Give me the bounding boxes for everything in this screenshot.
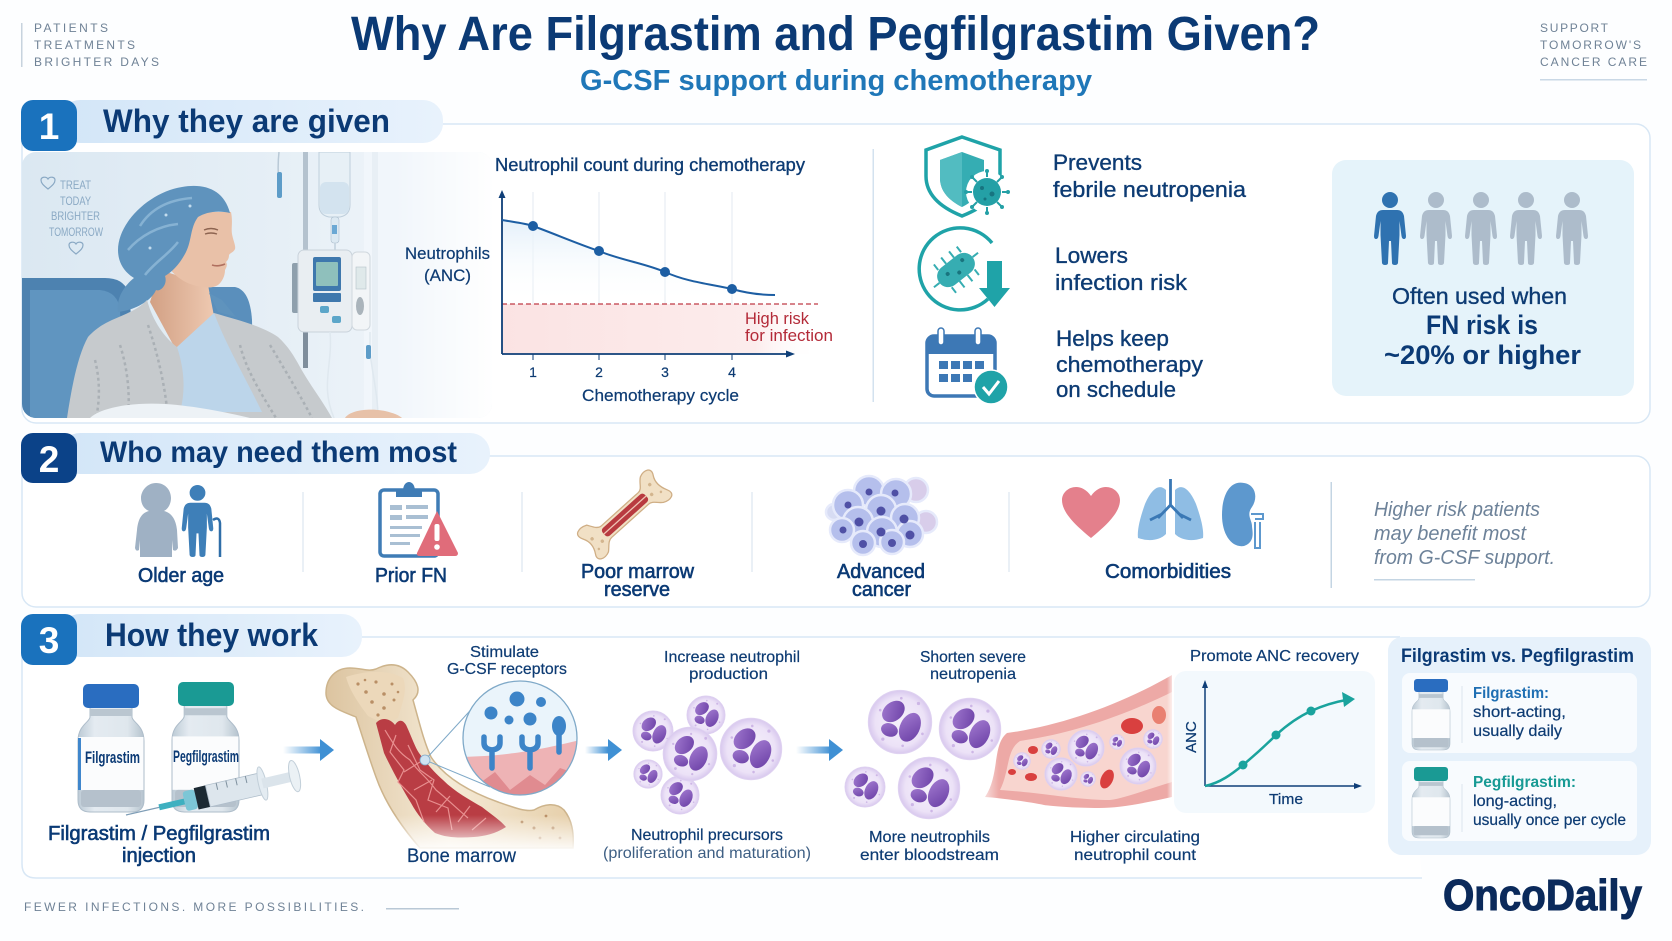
x-axis ticks <box>529 364 736 380</box>
gridlines <box>533 192 732 354</box>
comparison row: pegfilgrastim: Pegfilgrastim: <box>1473 774 1576 791</box>
section header 3: 3 <box>39 620 59 661</box>
section header 1: 1 <box>39 106 59 147</box>
note: higher risk patients: may benefit most <box>1374 523 1527 545</box>
benefit: lowers infection risk <box>1055 243 1188 295</box>
subtitle: G-CSF support during chemotherapy <box>580 65 1092 97</box>
step: neutrophil precursors: Neutrophil precursors <box>631 827 783 844</box>
icon: kidney <box>1222 483 1263 548</box>
icon: calendar with check <box>927 328 1008 404</box>
panel: how they work <box>22 637 1422 878</box>
panel: who may need them most <box>22 456 1650 607</box>
callout: FN risk threshold: Often used when <box>1392 283 1567 309</box>
x-axis ticks: 2 <box>595 364 603 380</box>
x-axis label: Chemotherapy cycle <box>582 386 739 405</box>
section header 3: How they work <box>105 617 318 653</box>
blanket <box>90 404 250 418</box>
step: ANC recovery: Promote ANC recovery <box>1190 648 1359 665</box>
comparison row: pegfilgrastim: usually once per cycle <box>1473 812 1626 829</box>
risk: older age <box>135 483 224 587</box>
risk: prior FN <box>375 482 458 587</box>
icon: heart <box>1062 487 1120 538</box>
risk: advanced cancer: cancer <box>852 579 911 601</box>
benefit: prevents febrile neutropenia: Prevents <box>1053 150 1142 175</box>
chart: neutrophil count during chemotherapy <box>405 155 833 405</box>
note: higher risk patients <box>1374 499 1555 580</box>
step: more neutrophils: More neutrophils <box>869 829 990 846</box>
IV bag <box>319 152 350 252</box>
step: blood vessel: neutrophil count <box>1074 847 1197 864</box>
icon: filgrastim vial <box>1412 679 1450 750</box>
callout: FN risk threshold: FN risk is <box>1426 310 1538 340</box>
footer tagline: FEWER INFECTIONS. MORE POSSIBILITIES. <box>24 900 364 914</box>
icon: vials and syringe <box>78 682 303 832</box>
comparison row: pegfilgrastim: long-acting, <box>1473 793 1557 810</box>
header note: left tagline: TREATMENTS <box>34 38 135 52</box>
benefit: lowers infection risk: infection risk <box>1055 270 1188 295</box>
step: neutrophil precursors: Increase neutrophil <box>664 649 800 666</box>
x-axis ticks: 4 <box>728 364 736 380</box>
benefit: helps keep chemotherapy on schedule: chemotherapy <box>1056 352 1203 377</box>
panel: filgrastim vs pegfilgrastim: Filgrastim vs. Pegfilgrastim <box>1401 646 1634 667</box>
face <box>172 212 236 288</box>
arrow <box>283 739 334 761</box>
axes <box>502 194 790 354</box>
photo: patient receiving chemotherapy <box>22 152 438 418</box>
icon: bacterium with down arrow <box>919 228 1010 310</box>
header note: right tagline: TOMORROW'S <box>1540 38 1641 52</box>
callout: FN risk threshold: ~20% or higher <box>1384 340 1581 370</box>
icon: vials and syringe: Pegfilgrastim <box>173 747 239 766</box>
risk label: High risk <box>745 309 809 328</box>
risk: poor marrow reserve: Poor marrow <box>581 561 695 583</box>
y-axis label <box>405 244 490 285</box>
comparison row: filgrastim: Filgrastim: <box>1473 685 1549 702</box>
benefit: prevents febrile neutropenia <box>1053 150 1247 202</box>
magnified receptor view <box>420 681 580 800</box>
panel: why they are given <box>22 124 1650 423</box>
risk: poor marrow reserve <box>575 467 695 601</box>
section header 2 <box>21 433 490 483</box>
risk label <box>745 309 833 345</box>
step: injection: Filgrastim / Pegfilgrastim <box>48 823 270 845</box>
blouse <box>177 313 262 412</box>
step: ANC recovery <box>1174 648 1375 813</box>
chart: ANC over time: ANC <box>1183 721 1200 753</box>
title: Why Are Filgrastim and Pegfilgrastim Given? <box>351 8 1320 61</box>
benefit: lowers infection risk: Lowers <box>1055 243 1128 268</box>
step: injection <box>48 682 303 867</box>
benefit: helps keep chemotherapy on schedule <box>1056 326 1203 402</box>
icon: pegfilgrastim vial <box>1412 767 1450 838</box>
wall message: TREAT <box>60 178 92 192</box>
step: bone marrow <box>320 644 580 867</box>
arrow <box>585 739 622 761</box>
step: more neutrophils <box>845 649 1026 864</box>
comparison row: filgrastim: usually daily <box>1473 723 1562 740</box>
step: neutrophil precursors <box>603 649 811 862</box>
risk: poor marrow reserve: reserve <box>604 579 670 601</box>
infusion pump <box>292 250 378 418</box>
section header 1: Why they are given <box>103 103 390 139</box>
icon: vials and syringe: Filgrastim <box>85 748 140 767</box>
header note: left tagline: BRIGHTER DAYS <box>34 55 159 69</box>
wall message <box>41 177 103 254</box>
area under the curve <box>502 220 775 304</box>
woman <box>67 186 402 418</box>
header note: right tagline: CANCER CARE <box>1540 55 1647 69</box>
headscarf <box>118 186 230 312</box>
y-axis label: Neutrophils <box>405 244 490 263</box>
y-axis label: (ANC) <box>424 266 471 285</box>
chair <box>22 278 254 418</box>
note: higher risk patients: from G-CSF support. <box>1374 547 1555 569</box>
step: bone marrow: Bone marrow <box>407 846 516 867</box>
callout: FN risk threshold <box>1332 160 1634 396</box>
right fade <box>456 152 492 418</box>
step: more neutrophils: Shorten severe <box>920 649 1026 666</box>
step: bone marrow: Stimulate <box>470 644 539 661</box>
step: blood vessel <box>975 670 1200 864</box>
section header 1 <box>21 100 443 151</box>
illustration: vessel with neutrophils <box>975 670 1175 812</box>
step: more neutrophils: enter bloodstream <box>860 847 999 864</box>
x-axis ticks: 1 <box>529 364 537 380</box>
header note: right tagline: SUPPORT <box>1540 21 1609 35</box>
wall message: BRIGHTER <box>51 209 100 223</box>
step: more neutrophils: neutropenia <box>930 666 1016 683</box>
icon: tumour cell cluster <box>826 476 937 555</box>
wall message: TODAY <box>60 194 91 208</box>
section header 2: Who may need them most <box>100 436 457 469</box>
risk threshold <box>502 303 818 305</box>
benefit: helps keep chemotherapy on schedule: Helps keep <box>1056 326 1169 351</box>
data points <box>528 221 737 294</box>
benefit: prevents febrile neutropenia: febrile neutropenia <box>1053 177 1247 202</box>
step: neutrophil precursors: (proliferation and maturation) <box>603 845 811 862</box>
chart title: Neutrophil count during chemotherapy <box>495 155 805 175</box>
chart: ANC over time: Time <box>1269 791 1303 808</box>
risk: advanced cancer <box>826 476 937 601</box>
panel: filgrastim vs pegfilgrastim <box>1388 637 1651 855</box>
wall message: TOMORROW <box>49 225 103 239</box>
arrow <box>796 739 843 761</box>
section header 2: 2 <box>39 439 59 480</box>
comparison row: filgrastim <box>1402 673 1637 753</box>
benefit: helps keep chemotherapy on schedule: on schedule <box>1056 377 1176 402</box>
icon: older couple <box>135 483 220 557</box>
risk label: for infection <box>745 326 833 345</box>
risk: comorbidities <box>1062 479 1263 583</box>
comparison row: filgrastim: short-acting, <box>1473 704 1566 721</box>
header note: left tagline: PATIENTS <box>34 21 108 35</box>
risk: comorbidities: Comorbidities <box>1105 561 1231 583</box>
icon: shield and virus <box>926 137 1010 216</box>
illustration: mature neutrophils <box>845 690 1001 819</box>
step: blood vessel: Higher circulating <box>1070 829 1200 846</box>
header note: right tagline <box>1540 21 1647 80</box>
x-axis ticks: 3 <box>661 364 669 380</box>
step: injection: injection <box>122 845 196 867</box>
high risk zone <box>502 304 818 354</box>
step: neutrophil precursors: production <box>689 666 768 683</box>
illustration: bone cross-section <box>320 665 580 853</box>
logo: OncoDaily: OncoDaily <box>1443 871 1642 920</box>
risk: prior FN: Prior FN <box>375 565 447 587</box>
step: bone marrow: G-CSF receptors <box>447 661 567 678</box>
icon: lungs <box>1138 479 1203 540</box>
icon: one in five people <box>1374 192 1588 265</box>
risk: older age: Older age <box>138 565 224 587</box>
chart: ANC over time <box>1174 671 1375 813</box>
hand <box>345 410 402 418</box>
neutrophil curve <box>502 220 775 295</box>
neck <box>150 270 214 350</box>
comparison row: pegfilgrastim <box>1402 761 1637 841</box>
icon: long bone <box>575 467 674 561</box>
note: higher risk patients: Higher risk patients <box>1374 499 1540 521</box>
icon: clipboard with warning <box>380 482 458 556</box>
IV pole <box>303 152 308 250</box>
risk: advanced cancer: Advanced <box>837 561 925 583</box>
section header 3 <box>21 614 362 665</box>
header note: left tagline <box>21 21 159 69</box>
cardigan <box>67 300 332 418</box>
illustration: precursor cells <box>633 696 782 814</box>
